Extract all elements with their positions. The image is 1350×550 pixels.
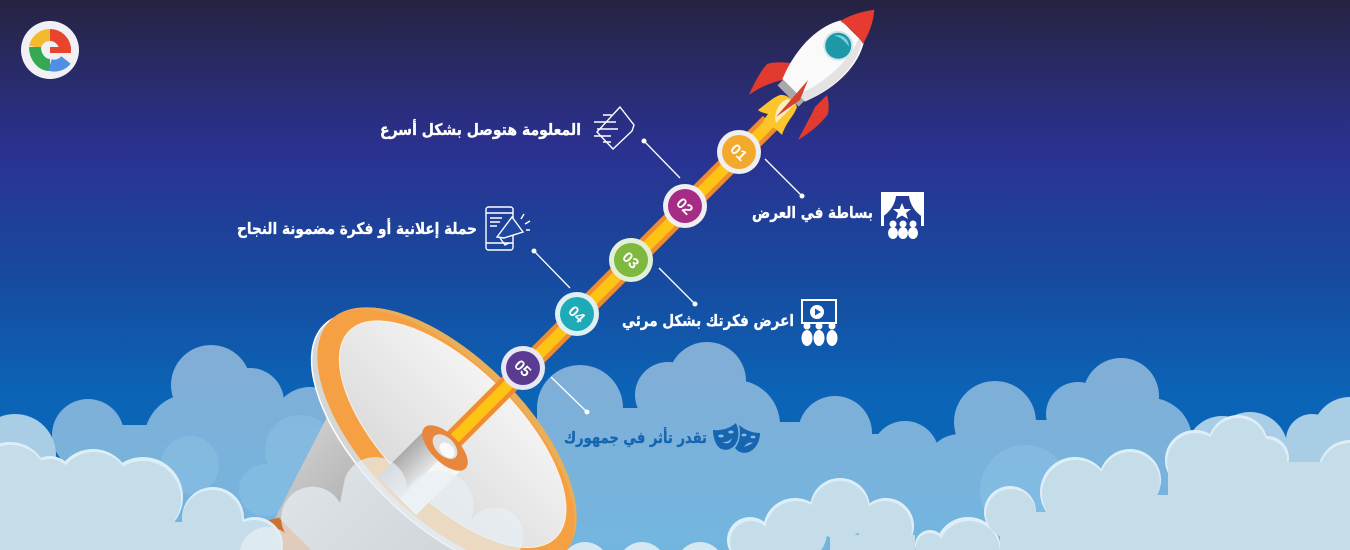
megaphone dish [310,307,577,550]
logo [21,21,79,79]
step 04 badge [555,292,599,336]
label 04: حملة إعلانية أو فكرة مضمونة النجاح [237,218,477,238]
translucent clouds over megaphone [240,457,524,550]
logo letter e [35,35,71,66]
flame core [775,99,795,123]
middle cloud layer [0,397,1350,462]
step 04 badge: 04 [564,303,589,327]
back cloud layer [52,342,1192,550]
step 01 badge [717,130,761,174]
icon: video screen audience [802,300,838,346]
rocket [749,0,892,140]
label 05: تقدر تأثر في جمهورك [564,427,707,448]
step 05 badge [501,346,545,390]
cloud rims [0,415,1350,550]
cloud bodies [0,418,1350,550]
step 02 badge [663,184,707,228]
label 03: اعرض فكرتك بشكل مرئي [622,311,794,331]
bottom cloud puffs [561,542,724,550]
icon: theater masks [713,423,760,453]
icon: theater stage [881,192,924,239]
label 02: المعلومة هتوصل بشكل أسرع [380,119,581,139]
step 03 badge [609,238,653,282]
icon: flying paper [594,107,634,149]
fin left [749,62,792,95]
connector lines [532,138,804,414]
megaphone inner tube [378,429,464,515]
step 05 badge: 05 [510,357,534,381]
step 03 badge: 03 [618,249,642,273]
megaphone [268,116,777,550]
icon: phone with megaphone [486,207,530,250]
rocket centre fin [776,80,808,117]
flame [758,95,797,135]
tube opening ring [422,425,468,471]
megaphone stem [452,123,770,441]
step 01 badge: 01 [726,141,750,165]
rocket body [770,0,892,114]
label 01: بساطة في العرض [752,203,873,223]
megaphone cone [268,418,453,550]
fin right [798,95,829,140]
inner back cloud highlights [161,415,1070,535]
front cloud layer [0,415,1350,550]
step 02 badge: 02 [672,195,696,219]
